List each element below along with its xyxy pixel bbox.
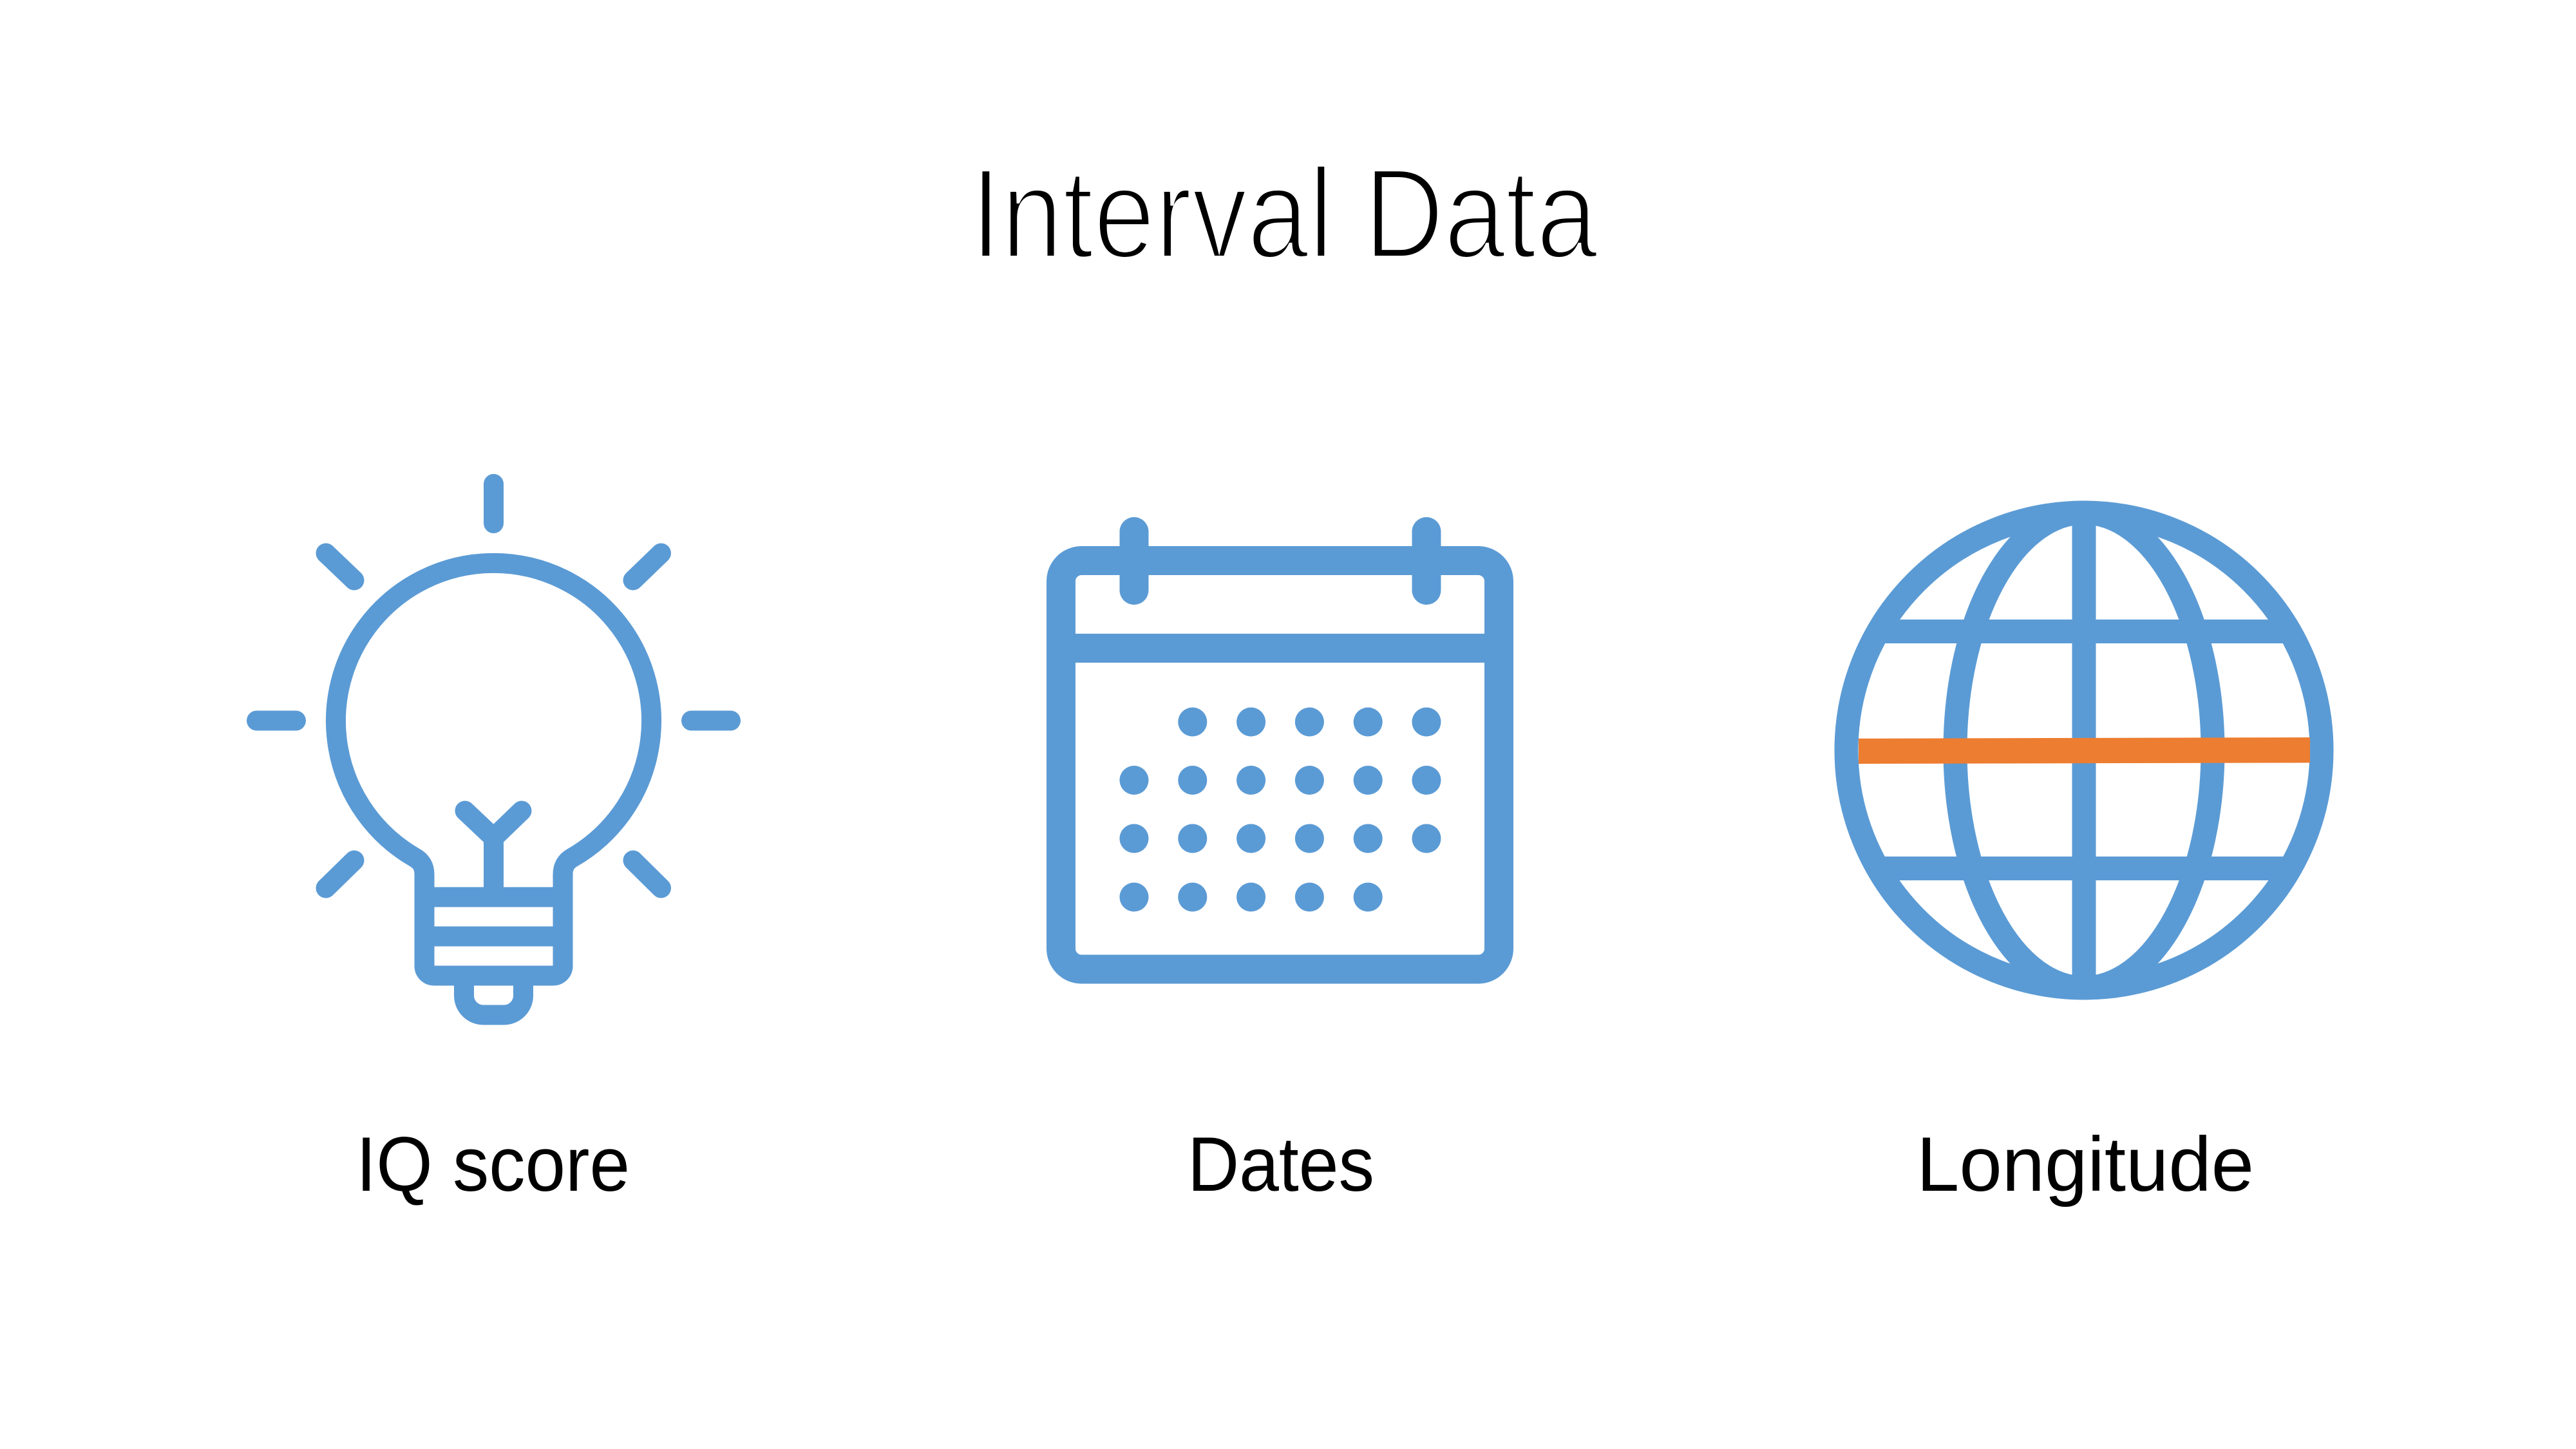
icon: calendar [1061, 532, 1499, 969]
icon: globe [1846, 513, 2322, 988]
icon: light bulb [256, 484, 730, 1015]
calendar frame [1061, 560, 1499, 969]
light rays [256, 484, 730, 888]
bulb glass and base outline [336, 563, 651, 976]
label: IQ score: IQ score [356, 1121, 630, 1208]
title: Interval Data [971, 142, 1598, 285]
label: Longitude: Longitude [1917, 1121, 2254, 1208]
globe grid [1846, 513, 2322, 988]
header bar [1061, 634, 1499, 663]
panel: Longitude [1846, 513, 2322, 1208]
bulb socket [464, 976, 523, 1015]
binding pegs [1134, 532, 1426, 590]
label: Dates: Dates [1188, 1121, 1374, 1208]
filament [465, 811, 522, 897]
date dots [1119, 707, 1441, 912]
panel: Dates [1061, 532, 1499, 1208]
panel: IQ score [256, 484, 730, 1208]
orange longitude line [1859, 737, 2310, 764]
screw thread bars [424, 897, 563, 936]
